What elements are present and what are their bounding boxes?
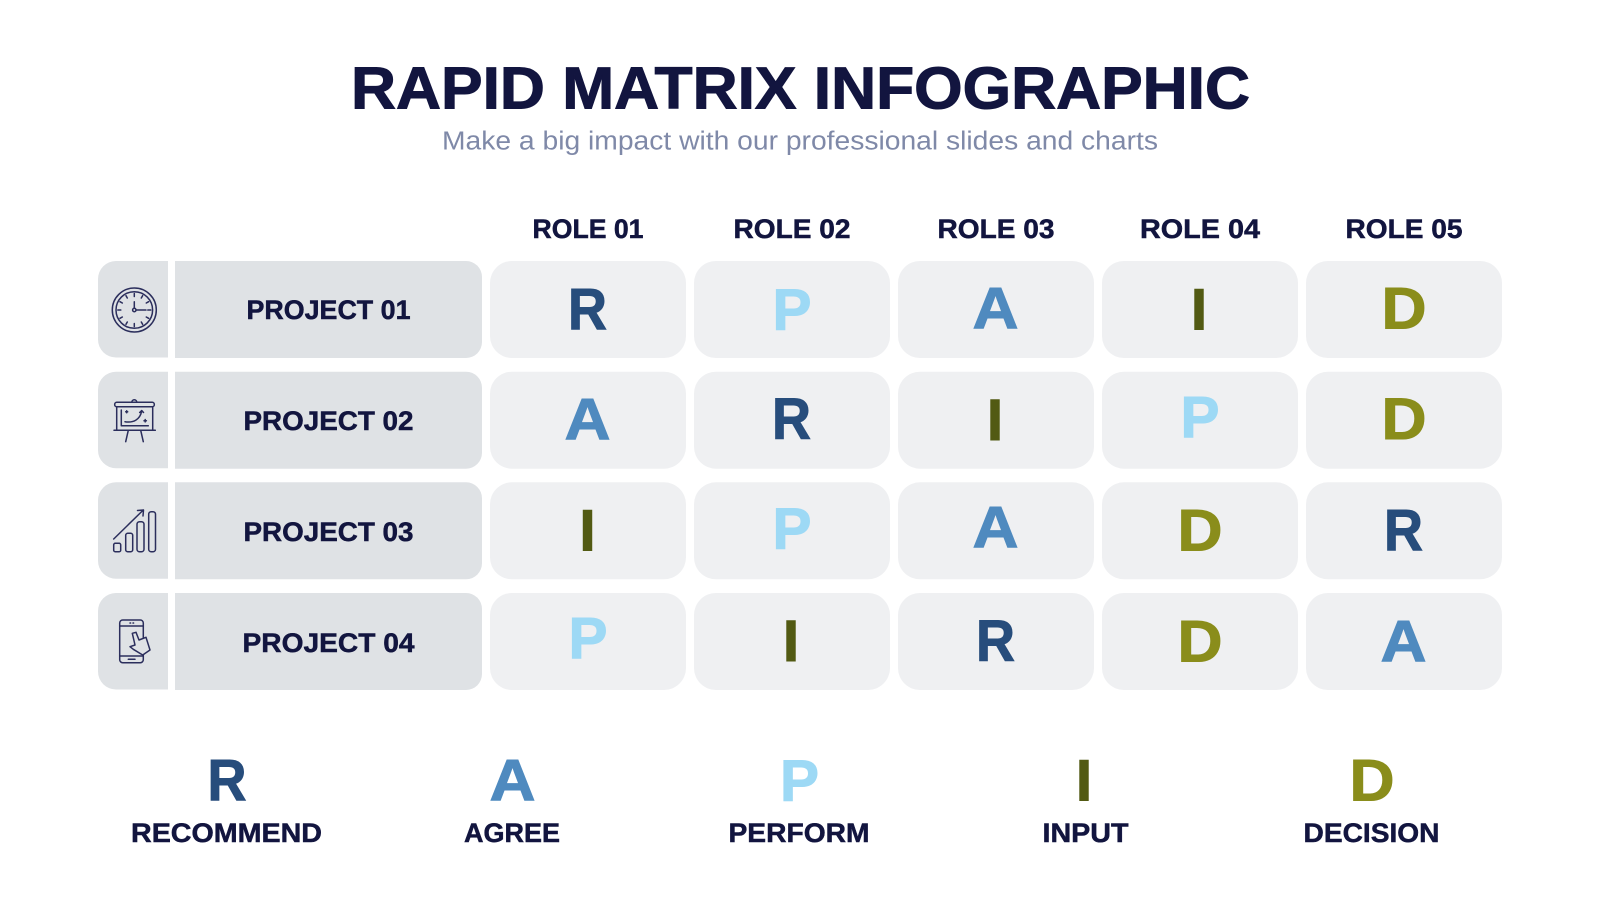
cell: R	[1306, 482, 1502, 579]
label: project 02	[175, 372, 482, 469]
title: RAPID MATRIX INFOGRAPHIC	[351, 56, 1250, 122]
role column headings: ROLE 03	[938, 213, 1054, 244]
role column headings: ROLE 05	[1346, 213, 1462, 244]
cell: A	[1306, 593, 1502, 690]
legend item: perform: P	[780, 748, 819, 814]
role column headings: ROLE 01	[532, 213, 644, 244]
cell: I: I	[1191, 278, 1207, 342]
cell: I: I	[579, 498, 596, 564]
legend item: recommend: RECOMMEND	[131, 817, 322, 848]
legend item: decision: D	[1350, 748, 1394, 814]
cell: D	[1102, 593, 1298, 690]
legend item: input: INPUT	[1042, 817, 1129, 848]
cell: I	[1102, 261, 1298, 358]
legend item: agree	[464, 748, 560, 848]
cell: P	[490, 593, 686, 690]
icon panel: growth chart	[98, 482, 168, 579]
label: project 01	[175, 261, 482, 358]
row: project 01	[98, 261, 1502, 358]
cell: P	[694, 482, 890, 579]
cell: P: P	[772, 278, 812, 342]
cell: I	[490, 482, 686, 579]
row: project 03	[98, 482, 1502, 579]
cell: R	[898, 593, 1094, 690]
cell: A	[898, 482, 1094, 579]
label: project 03: PROJECT 03	[244, 516, 414, 547]
cell: D	[1306, 372, 1502, 469]
cell: I: I	[783, 609, 799, 674]
legend	[131, 748, 1440, 848]
subtitle: Make a big impact with our professional slides and charts	[442, 128, 1158, 156]
cell: D: D	[1382, 276, 1426, 342]
icon panel: clock	[98, 261, 168, 358]
cell: R: R	[568, 278, 607, 342]
cell: P	[694, 261, 890, 358]
cell: R	[694, 372, 890, 469]
row: project 02	[98, 372, 1502, 469]
row: project 04	[98, 593, 1502, 690]
cell: R	[490, 261, 686, 358]
legend item: decision	[1304, 748, 1440, 848]
label: project 04: PROJECT 04	[242, 627, 414, 658]
cell: R: R	[772, 387, 811, 452]
cell: A	[490, 372, 686, 469]
cell: A: A	[972, 276, 1018, 342]
cell: P	[1102, 372, 1298, 469]
legend item: agree: A	[490, 748, 536, 814]
label: project 02: PROJECT 02	[244, 405, 414, 436]
cell: A: A	[564, 388, 610, 452]
cell: I	[898, 372, 1094, 469]
cell: I: I	[987, 388, 1003, 453]
legend item: recommend	[131, 748, 322, 848]
legend item: decision: DECISION	[1304, 817, 1440, 848]
role column headings: ROLE 02	[734, 213, 850, 244]
label: project 03	[175, 482, 482, 579]
cell: R: R	[1384, 498, 1423, 564]
cell: P: P	[568, 606, 608, 671]
legend item: recommend: R	[208, 748, 246, 814]
icon panel: presentation board	[98, 372, 168, 468]
cell: P: P	[1180, 385, 1220, 450]
label: project 04	[175, 593, 482, 690]
cell: R: R	[976, 609, 1015, 674]
cell: I	[694, 593, 890, 690]
cell: D: D	[1178, 610, 1222, 674]
label: project 01: PROJECT 01	[246, 294, 410, 325]
role column headings: ROLE 04	[1140, 213, 1260, 244]
cell: D	[1306, 261, 1502, 358]
legend item: perform	[728, 748, 870, 848]
cell: P: P	[772, 496, 812, 562]
legend item: perform: PERFORM	[728, 817, 870, 848]
cell: A	[898, 261, 1094, 358]
legend item: input: I	[1076, 748, 1092, 814]
cell: A: A	[1380, 610, 1426, 674]
legend item: agree: AGREE	[464, 817, 560, 848]
legend item: input	[1042, 748, 1129, 848]
cell: D: D	[1382, 387, 1426, 452]
icon panel: phone touch	[98, 593, 168, 690]
role column headings	[532, 213, 1462, 244]
cell: D: D	[1178, 498, 1222, 564]
cell: A: A	[972, 496, 1018, 560]
cell: D	[1102, 482, 1298, 579]
